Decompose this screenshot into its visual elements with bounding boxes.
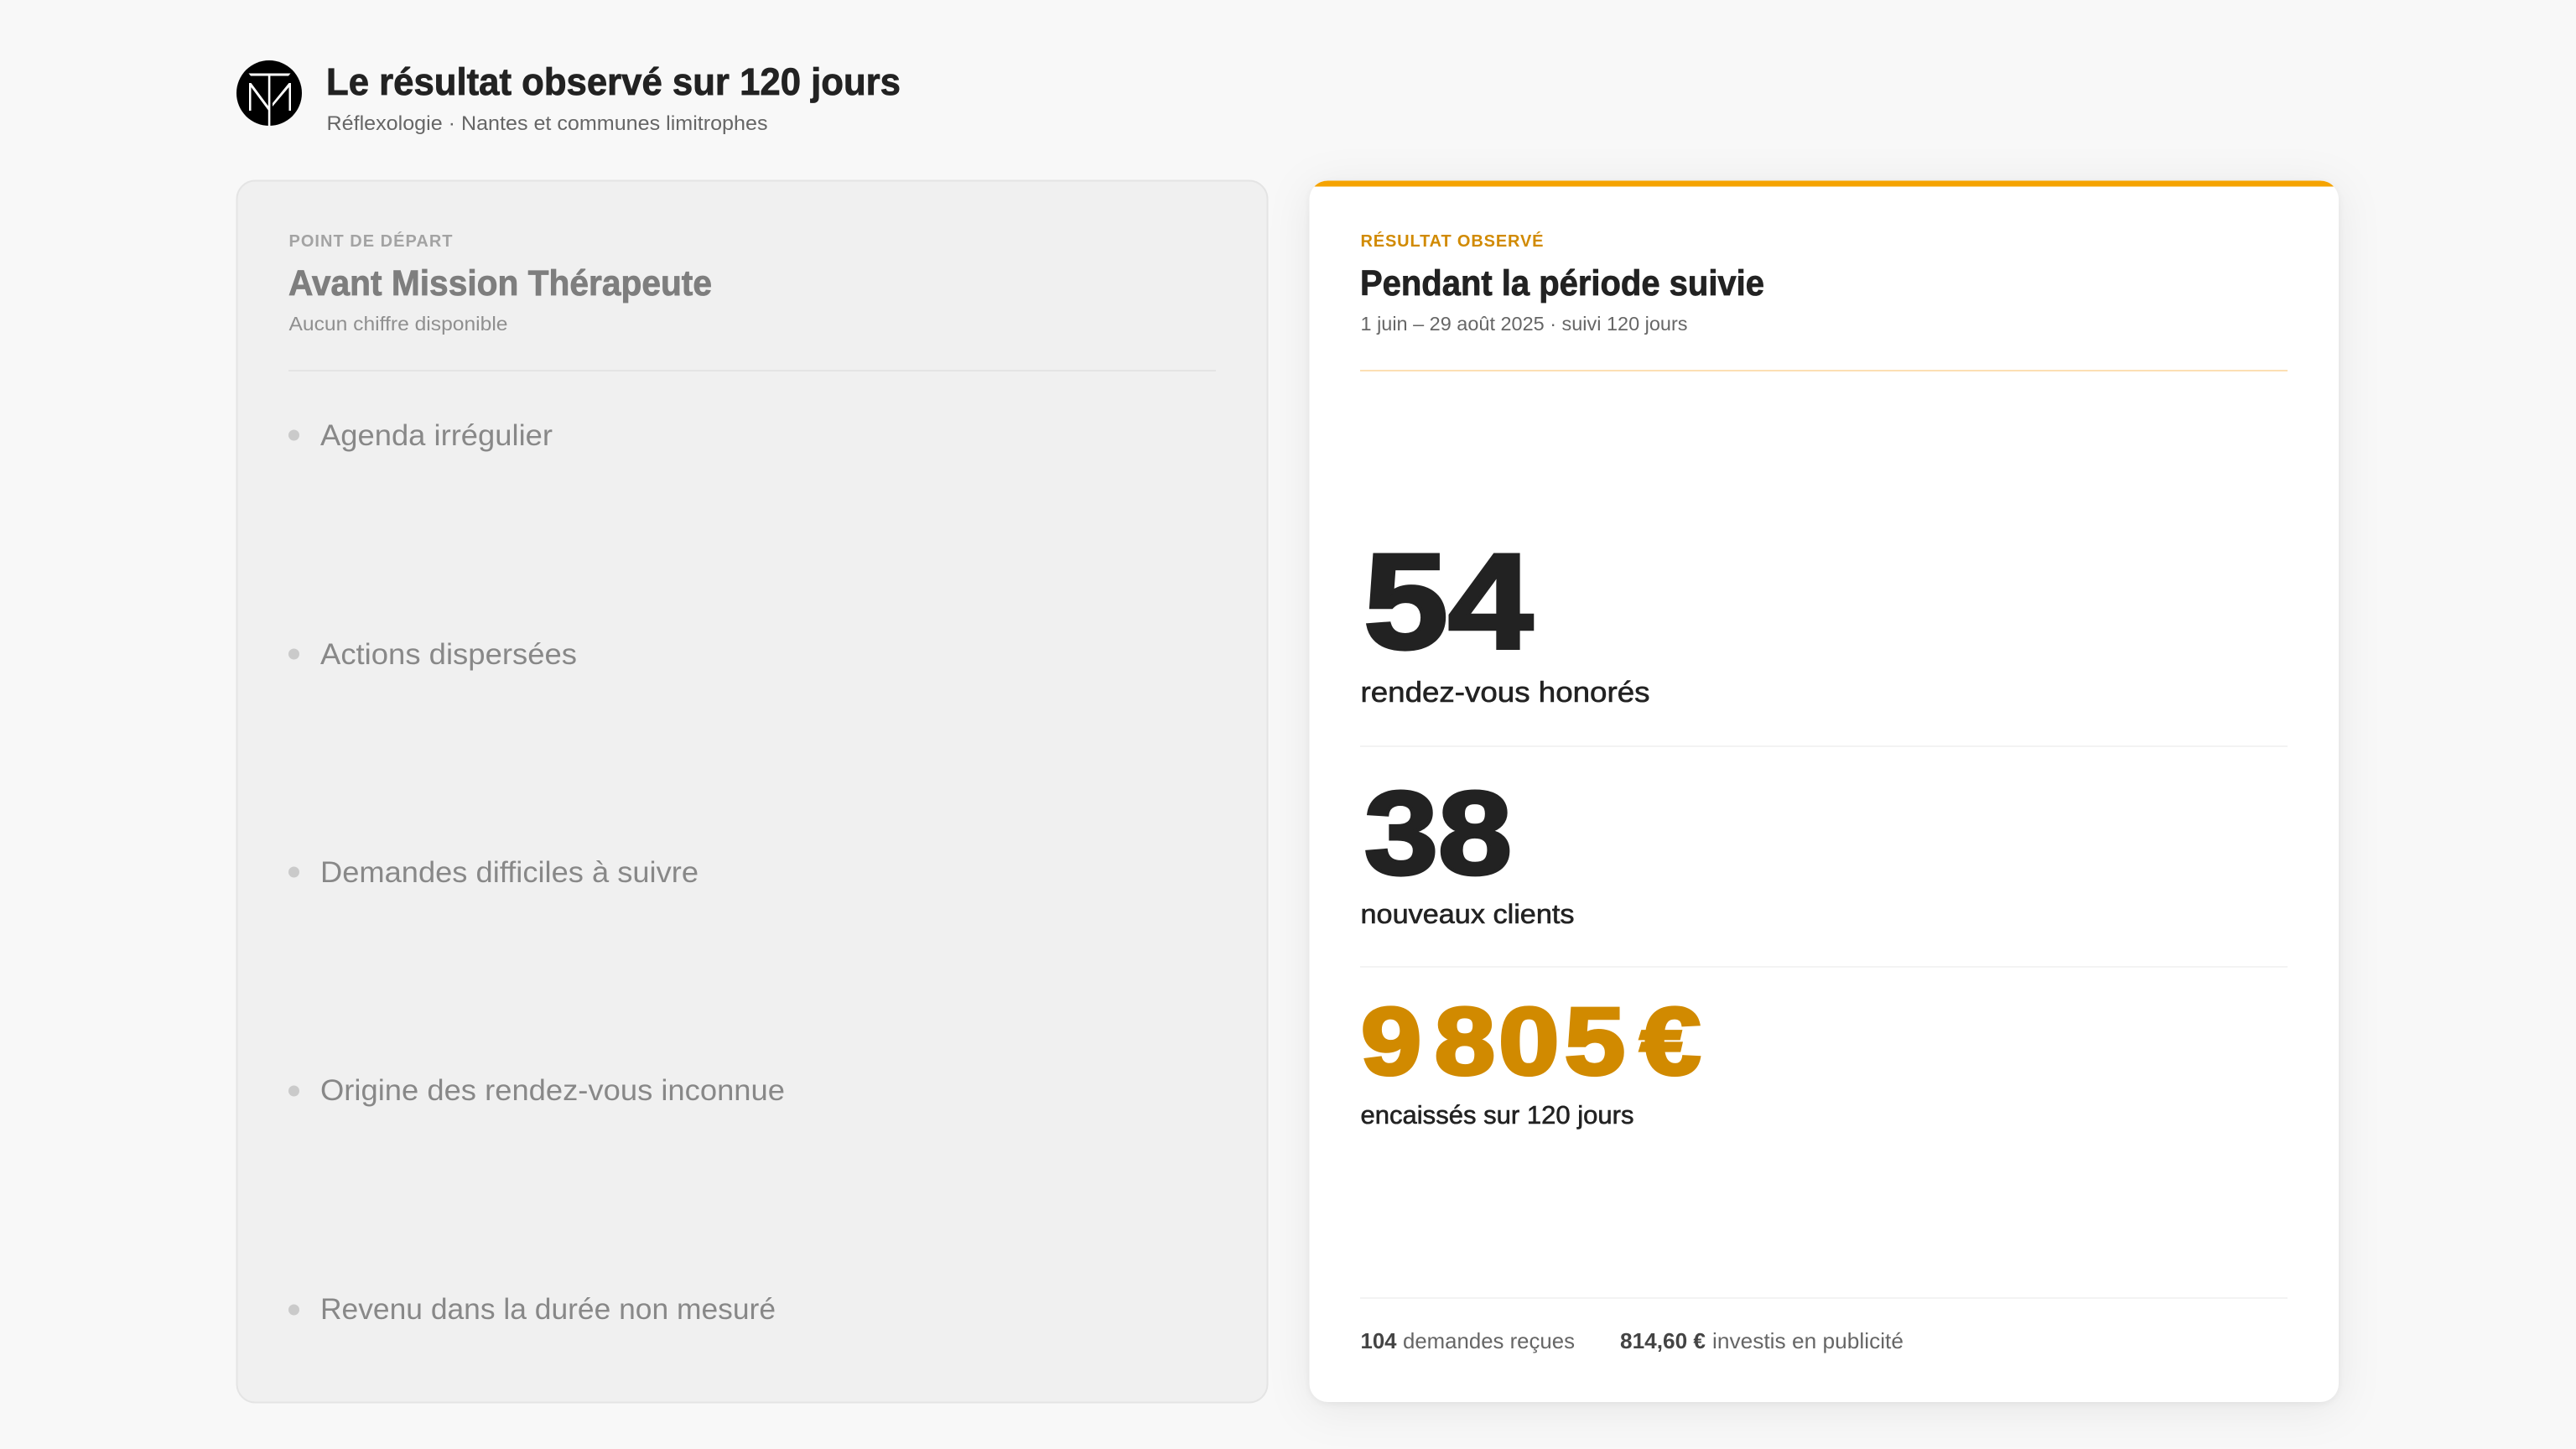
note: aucun chiffre: Aucun chiffre disponible	[288, 313, 508, 335]
stat: 38 nouveaux clients: nouveaux clients	[1360, 899, 1575, 929]
panel: résultat	[1310, 181, 2339, 1402]
footer stats: demandes reçues	[1403, 1328, 1575, 1353]
stat: 38 nouveaux clients: 38	[1364, 766, 1512, 899]
panel: avant	[236, 181, 1268, 1402]
icon: logo TM	[236, 60, 302, 126]
footer stats: 814,60 €	[1620, 1328, 1706, 1353]
stat: 9 805 € encaissés: 9 805 €	[1361, 987, 1701, 1094]
eyebrow: résultat observé: RÉSULTAT OBSERVÉ	[1360, 231, 1543, 251]
list item: actions: Actions dispersées	[320, 638, 577, 671]
heading: pendant la période: Pendant la période suivie	[1360, 263, 1764, 304]
list item: origine: Origine des rendez-vous inconnue	[320, 1074, 785, 1107]
list item: demandes: Demandes difficiles à suivre	[320, 856, 699, 889]
footer stats	[1360, 1328, 1903, 1353]
footer stats: investis en publicité	[1712, 1328, 1903, 1353]
heading: avant mission: Avant Mission Thérapeute	[288, 263, 712, 304]
title: Le résultat observé sur 120 jours	[326, 60, 901, 103]
footer stats: 104	[1360, 1328, 1397, 1353]
header	[236, 60, 901, 135]
stat: 54 rendez-vous	[1360, 526, 1650, 709]
stat: 54 rendez-vous: rendez-vous honorés	[1360, 677, 1650, 709]
stat: 9 805 € encaissés: encaissés sur 120 jours	[1360, 1100, 1633, 1130]
note: dates: 1 juin – 29 août 2025 · suivi 120 jours	[1360, 313, 1687, 335]
eyebrow: point de départ: POINT DE DÉPART	[288, 231, 453, 251]
subtitle: Réflexologie · Nantes et communes limitrophes	[327, 112, 768, 135]
stat: 54 rendez-vous: 54	[1363, 526, 1533, 678]
list item: revenu: Revenu dans la durée non mesuré	[320, 1293, 776, 1326]
stat: 38 nouveaux clients	[1360, 766, 1575, 929]
list item: agenda: Agenda irrégulier	[320, 419, 553, 452]
